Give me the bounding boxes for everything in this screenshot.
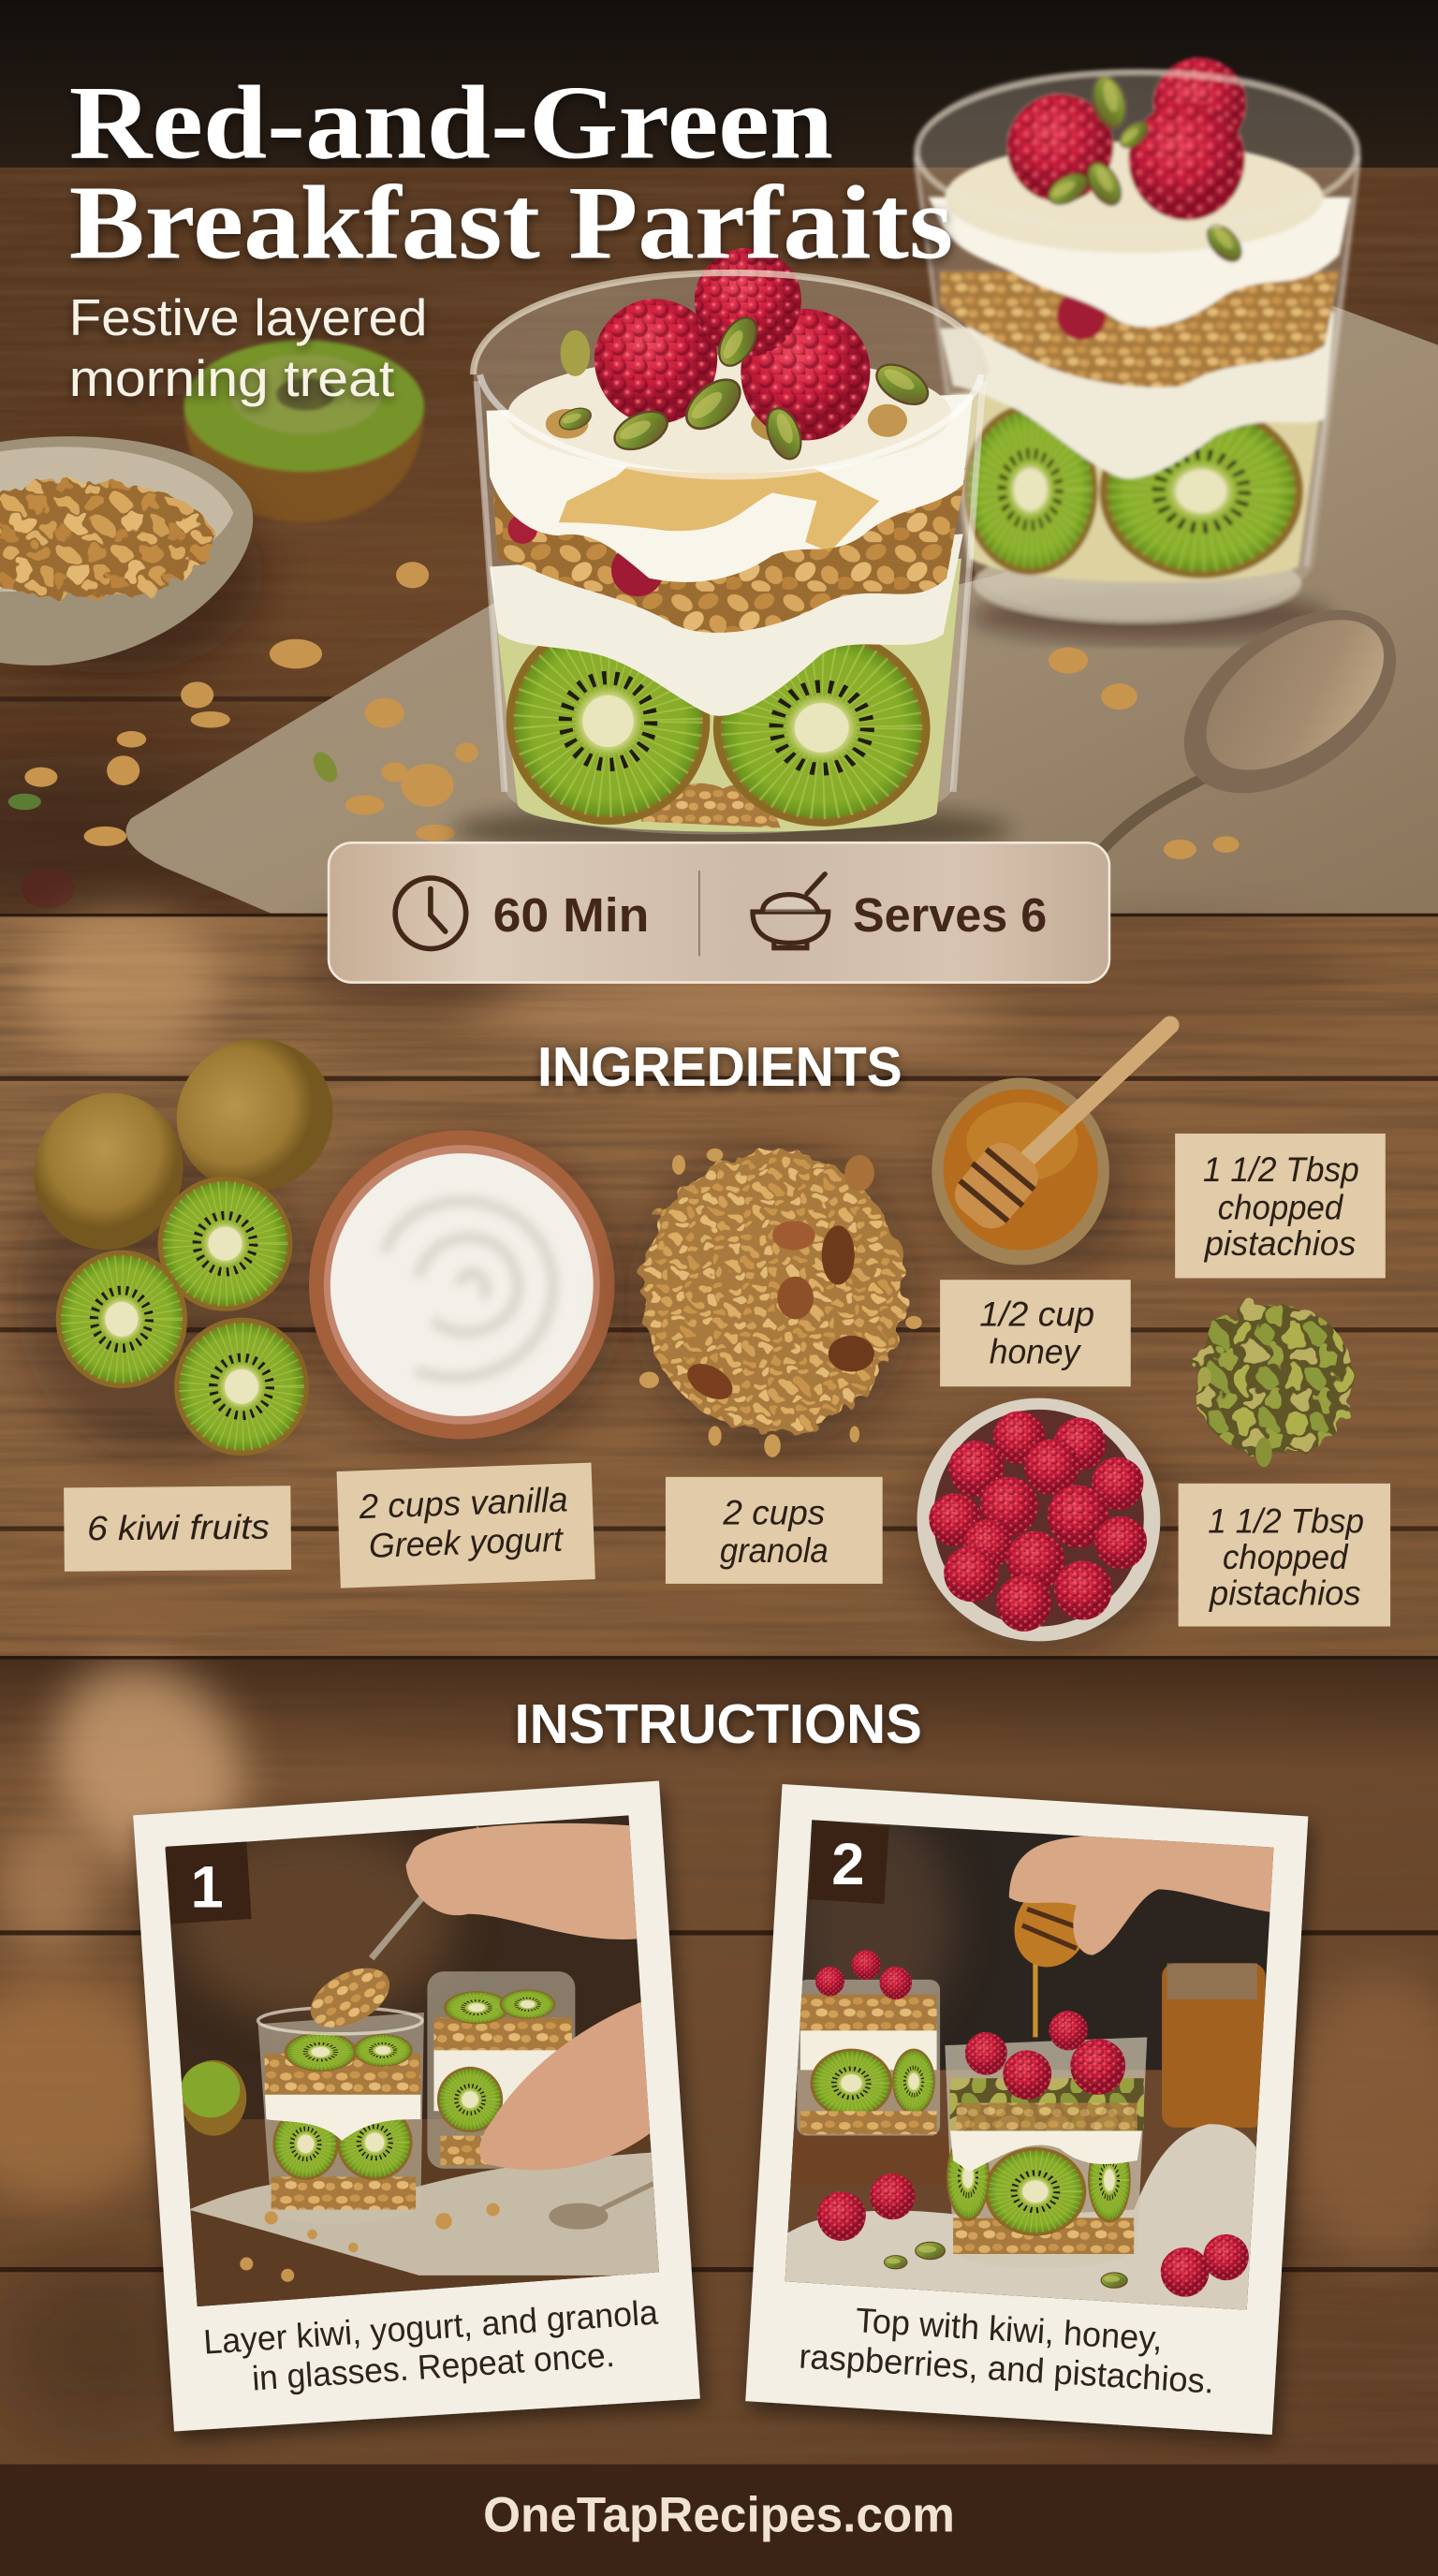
step badge 2 xyxy=(809,1821,889,1904)
title: Red-and-Green xyxy=(69,65,833,181)
label: pistachios repeated: chopped xyxy=(1223,1538,1349,1576)
main glass xyxy=(945,2037,1147,2269)
caption: step 1 xyxy=(202,2293,662,2401)
step badge 2: 2 xyxy=(831,1832,864,1897)
ingredient: pistachios xyxy=(1193,1303,1354,1467)
main glass xyxy=(258,2012,424,2187)
caption: step 2: raspberries, and pistachios. xyxy=(798,2337,1215,2401)
spoon xyxy=(1098,573,1430,855)
dipper with honey xyxy=(1034,1955,1036,2037)
back glass xyxy=(797,1980,940,2136)
right hand xyxy=(479,1996,657,2170)
card: step 2 xyxy=(745,1784,1308,2435)
heading: ingredients: INGREDIENTS xyxy=(537,1035,902,1098)
label: yogurt: Greek yogurt xyxy=(368,1520,565,1565)
icon: bowl xyxy=(753,874,829,948)
card: step 1 xyxy=(133,1781,700,2432)
photo: step 1 xyxy=(156,1808,666,2317)
small glass xyxy=(427,1971,575,2169)
stat: time: 60 Min xyxy=(493,888,649,942)
bowl of granola xyxy=(0,436,263,674)
crumbs xyxy=(240,2203,500,2282)
back parfait glass xyxy=(914,57,1360,642)
front parfait glass xyxy=(452,248,1011,856)
caption: step 1: in glasses. Repeat once. xyxy=(251,2335,616,2398)
heading: instructions: INSTRUCTIONS xyxy=(514,1692,922,1755)
icon: clock xyxy=(395,878,466,949)
footer xyxy=(0,2465,1438,2576)
board xyxy=(785,2136,950,2185)
label: pistachios: 1 1/2 Tbsp xyxy=(1203,1150,1359,1189)
caption: step 2: Top with kiwi, honey, xyxy=(855,2301,1164,2358)
label: honey xyxy=(940,1280,1131,1386)
label: pistachios: chopped xyxy=(1218,1188,1344,1226)
caption: step 1: Layer kiwi, yogurt, and granola xyxy=(202,2293,659,2362)
label: granola: granola xyxy=(720,1531,829,1570)
cloth xyxy=(772,2124,1266,2313)
ingredient: kiwi fruits xyxy=(12,1011,360,1462)
ingredient: granola pile xyxy=(628,1147,922,1457)
label: yogurt: 2 cups vanilla xyxy=(358,1480,568,1526)
stat: servings: Serves 6 xyxy=(853,888,1047,942)
label: pistachios repeated xyxy=(1179,1484,1390,1627)
step badge 1 xyxy=(166,1841,252,1924)
photo: step 2 xyxy=(772,1808,1282,2317)
label: pistachios xyxy=(1175,1134,1386,1278)
label: pistachios repeated: pistachios xyxy=(1209,1574,1360,1613)
section: ingredients background xyxy=(0,914,1438,1658)
napkin xyxy=(126,304,1438,914)
label: pistachios repeated: 1 1/2 Tbsp xyxy=(1208,1502,1364,1541)
step badge 1: 1 xyxy=(191,1855,224,1921)
subtitle: Festive layered xyxy=(69,289,427,346)
ingredient: raspberry bowl xyxy=(917,1398,1167,1649)
stats bar xyxy=(329,842,1109,983)
title xyxy=(69,65,953,282)
label: honey: 1/2 cup xyxy=(979,1295,1094,1333)
label: yogurt xyxy=(337,1463,595,1588)
section: hero background xyxy=(0,0,1438,920)
ingredient: honey jar xyxy=(932,1025,1170,1273)
label: honey: honey xyxy=(990,1333,1082,1371)
scattered granola crumbs xyxy=(8,562,1240,909)
title: Breakfast Parfaits xyxy=(69,166,953,282)
label: kiwi: 6 kiwi fruits xyxy=(87,1508,270,1547)
hand with spoon xyxy=(372,1828,480,1958)
kiwi half background xyxy=(184,340,424,522)
hand xyxy=(1009,1836,1282,1955)
honey dipper head xyxy=(945,1134,1049,1238)
loose raspberries xyxy=(817,2191,866,2241)
spoon small xyxy=(549,2203,609,2230)
footer text: OneTapRecipes.com xyxy=(483,2488,955,2543)
section: instructions background xyxy=(0,1629,1438,2466)
caption: step 2 xyxy=(798,2298,1218,2401)
label: granola xyxy=(666,1477,883,1584)
label: kiwi xyxy=(64,1486,291,1572)
jar xyxy=(1162,1963,1266,2128)
subtitle xyxy=(69,289,427,407)
ingredient: yogurt bowl xyxy=(309,1131,624,1454)
label: pistachios: pistachios xyxy=(1204,1224,1356,1263)
label: granola: 2 cups xyxy=(722,1494,825,1532)
subtitle: morning treat xyxy=(69,350,394,407)
